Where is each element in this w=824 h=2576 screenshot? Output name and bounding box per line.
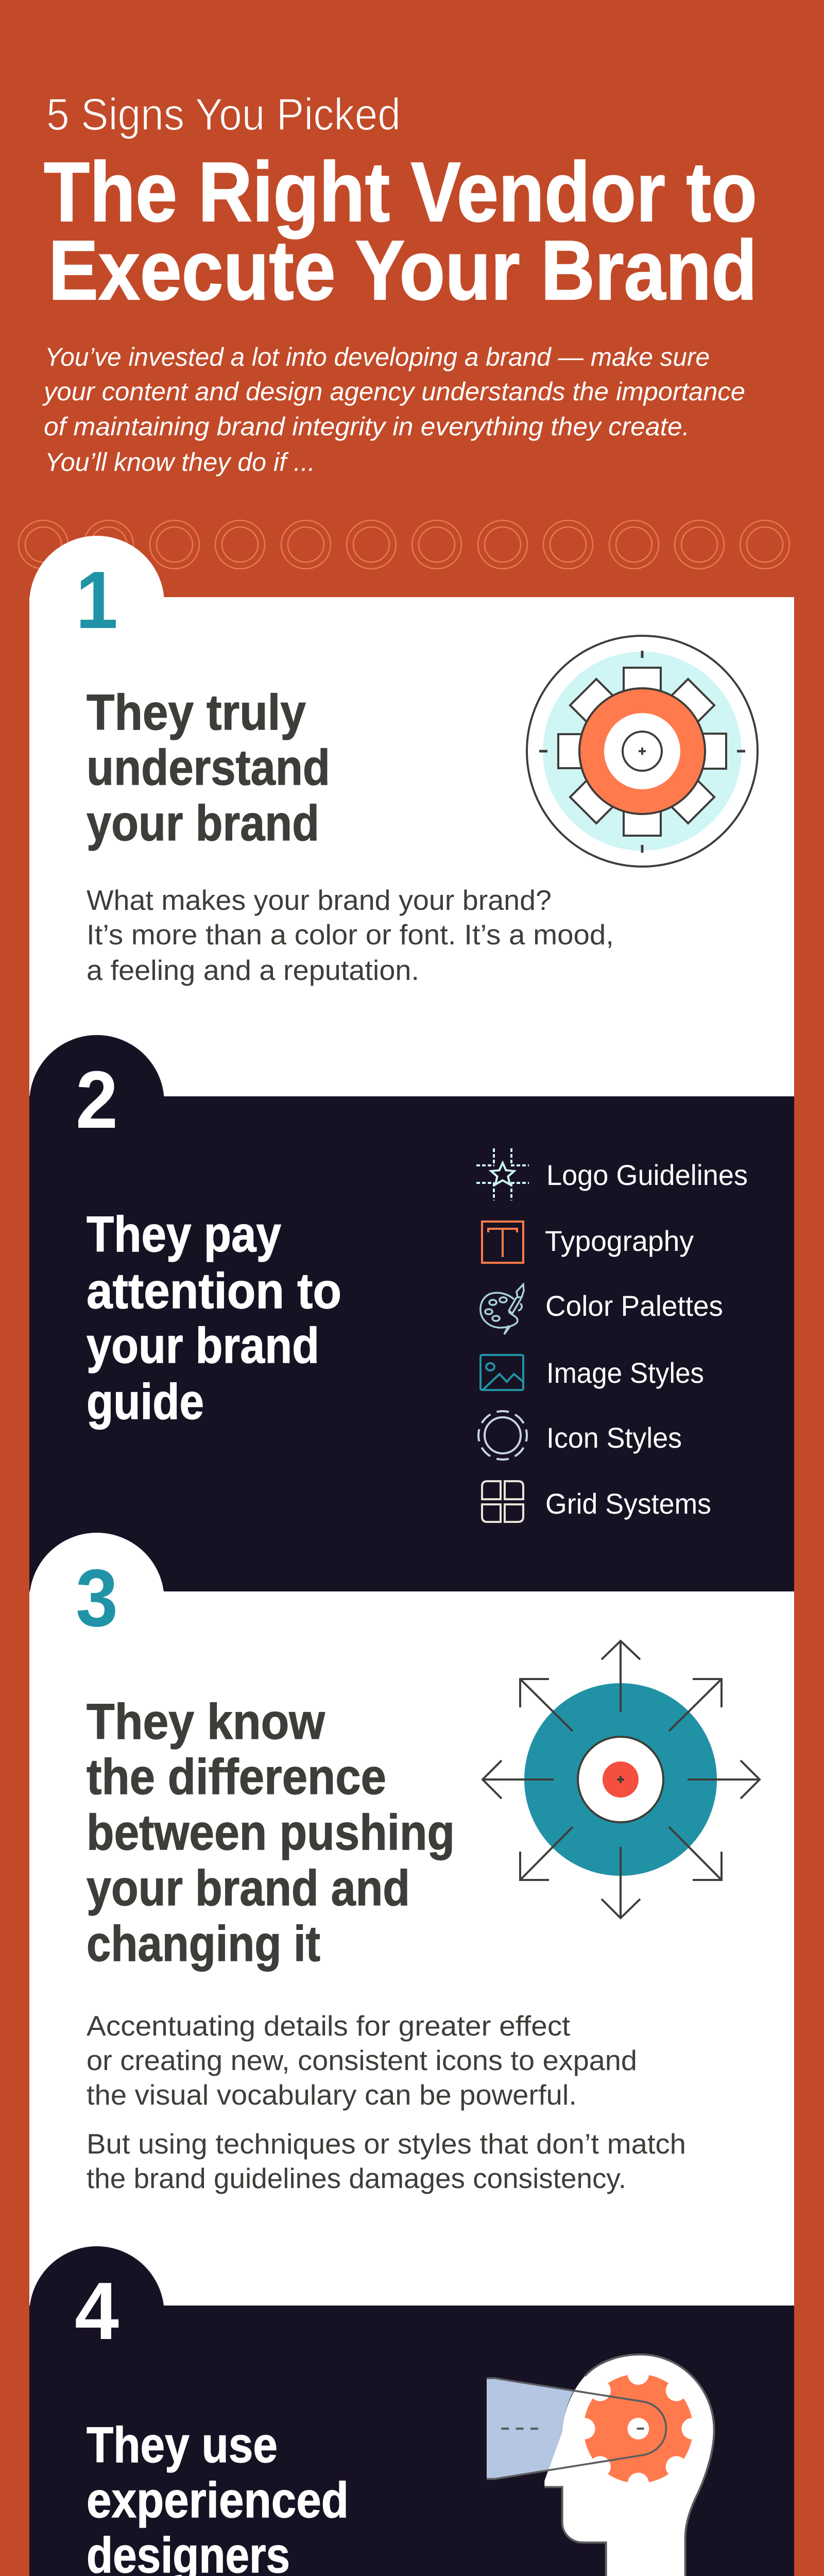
heading 1: your brand <box>87 795 319 851</box>
heading 2: guide <box>87 1374 204 1430</box>
intro paragraph: of maintaining brand integrity in everything they create. <box>44 412 690 441</box>
icon: head with gear <box>487 2354 714 2576</box>
body text 3: or creating new, consistent icons to expand <box>87 2044 637 2076</box>
heading 4: experienced <box>87 2472 349 2528</box>
label: icon styles: Icon Styles <box>546 1421 682 1454</box>
panel 2 background <box>29 1096 794 1591</box>
number 2: 2 <box>76 1055 118 1145</box>
number 4: 4 <box>75 2266 119 2357</box>
main title line 2: Execute Your Brand <box>48 223 757 317</box>
icon: typography <box>482 1222 523 1263</box>
label: logo guidelines: Logo Guidelines <box>546 1159 748 1191</box>
panel: sign 2 <box>29 1035 794 1591</box>
label: grid systems: Grid Systems <box>545 1487 711 1520</box>
panel: sign 1 <box>29 536 794 1096</box>
heading 1: understand <box>87 739 330 795</box>
decorative ring band top <box>19 520 789 569</box>
heading 3: between pushing <box>87 1804 455 1860</box>
body text 3: Accentuating details for greater effect <box>87 2010 570 2042</box>
heading 3: the difference <box>87 1749 386 1805</box>
icon: image <box>480 1355 523 1390</box>
panel 3 background <box>29 1591 794 2306</box>
heading 1: They truly <box>87 684 306 740</box>
intro paragraph: You’ve invested a lot into developing a brand — make sure <box>45 343 710 371</box>
panel 1 background <box>29 597 794 1096</box>
panel: sign 3 <box>29 1533 794 2306</box>
number tab 1 <box>29 536 164 671</box>
icon: push arrows <box>483 1641 760 1918</box>
checklist <box>476 1148 748 1522</box>
body text 3: But using techniques or styles that don’t match <box>87 2128 686 2160</box>
panel: sign 4 <box>29 2246 794 2576</box>
icon: color palette <box>480 1284 524 1334</box>
heading 2: your brand <box>87 1317 319 1374</box>
heading 3: They know <box>87 1693 325 1750</box>
label: color palettes: Color Palettes <box>545 1290 723 1322</box>
panel 4 background <box>29 2306 794 2576</box>
heading 4: They use <box>87 2417 278 2473</box>
body text 1 <box>87 884 614 986</box>
heading 2: attention to <box>87 1263 341 1319</box>
number tab 2 <box>29 1035 164 1170</box>
heading 2 <box>87 1206 341 1430</box>
heading 3 <box>87 1693 455 1972</box>
main title line 1: The Right Vendor to <box>44 145 757 239</box>
body text 1: It’s more than a color or font. It’s a mood, <box>87 919 614 951</box>
icon: grid systems <box>482 1481 523 1522</box>
body text 1: What makes your brand your brand? <box>87 884 552 916</box>
subtitle: 5 Signs You Picked <box>46 90 401 140</box>
label: typography: Typography <box>545 1225 694 1257</box>
intro paragraph: your content and design agency understands the importance <box>42 377 745 406</box>
icon: icon styles <box>478 1411 527 1460</box>
intro paragraph: You’ll know they do if ... <box>45 448 315 477</box>
icon: gear target <box>527 636 758 867</box>
heading 4 <box>87 2417 349 2576</box>
body text 3: the visual vocabulary can be powerful. <box>87 2079 577 2111</box>
number tab 3 <box>29 1533 164 1668</box>
heading 3: your brand and <box>87 1860 410 1916</box>
number 3: 3 <box>76 1553 118 1643</box>
label: image styles: Image Styles <box>546 1357 704 1389</box>
body text 3 <box>87 2010 686 2194</box>
intro paragraph <box>42 343 745 477</box>
body text 3: the brand guidelines damages consistency. <box>87 2162 626 2194</box>
heading 3: changing it <box>87 1916 320 1972</box>
title block <box>44 90 757 317</box>
heading 2: They pay <box>87 1206 281 1262</box>
heading 1 <box>87 684 330 851</box>
icon: logo guidelines <box>476 1148 529 1200</box>
number tab 4 <box>29 2246 164 2381</box>
body text 1: a feeling and a reputation. <box>87 954 419 986</box>
number 1: 1 <box>76 555 118 646</box>
